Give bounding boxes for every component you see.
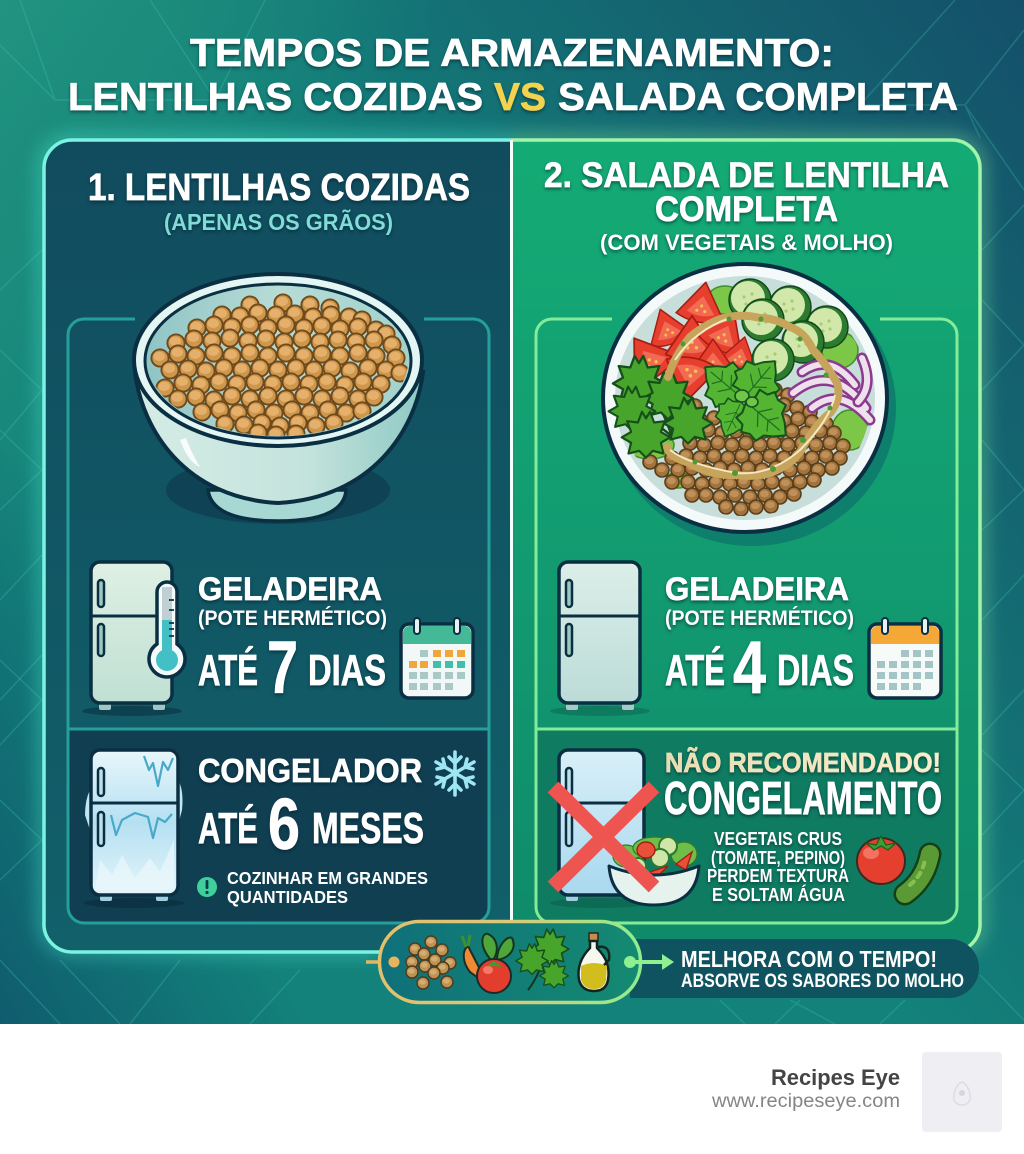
text: congelamento warning: NÃO RECOMENDADO!: [665, 747, 941, 778]
icon: snowflake: [436, 752, 474, 795]
ingredients capsule: [380, 922, 674, 1002]
cucumbers: [729, 279, 848, 381]
mint: [690, 346, 803, 455]
title: [68, 32, 958, 119]
text: congelamento warning: [664, 747, 942, 905]
lentils on plate: [643, 383, 850, 516]
title: TEMPOS DE ARMAZENAMENTO:: [190, 32, 834, 75]
label pill: ABSORVE OS SABORES DO MOLHO: [681, 971, 964, 992]
icon: frozen refrigerator: [84, 750, 184, 908]
storage frame: left: [67, 319, 490, 923]
text: geladeira 7 dias: DIAS: [308, 646, 386, 695]
parsley: [609, 356, 712, 458]
tomatoes: [612, 278, 765, 406]
text: congelamento warning: (TOMATE, PEPINO): [711, 848, 845, 868]
footer brand: [711, 1052, 1002, 1132]
logo placeholder: [922, 1052, 1002, 1132]
icon: olive oil: [578, 933, 609, 991]
heading: salada de lentilha completa: 2. SALADA DE LENTILHA: [544, 156, 949, 195]
text: congelamento warning: PERDEM TEXTURA: [707, 866, 849, 886]
connector left: [366, 960, 388, 964]
arrow: [624, 954, 674, 970]
text: congelador 6 meses: ATÉ: [198, 803, 258, 853]
icon: calendar teal: [401, 618, 473, 698]
icon: refrigerator: [550, 562, 650, 716]
lettuce: [626, 286, 868, 488]
red onions: [793, 358, 870, 420]
center divider: [510, 140, 513, 924]
footer brand: www.recipeseye.com: [711, 1091, 900, 1112]
salad bowl: [609, 837, 699, 905]
storage frame: right: [535, 319, 958, 923]
icon: salad plate: [603, 264, 896, 546]
text: congelador 6 meses: MESES: [312, 804, 424, 853]
icon: parsley: [516, 929, 569, 990]
text: congelador 6 meses: [198, 752, 424, 865]
heading: lentilhas cozidas: 1. LENTILHAS COZIDAS: [88, 167, 470, 209]
icon: thermometer: [149, 582, 185, 677]
panel: complete salad: [511, 140, 980, 952]
callout: batch cooking tip: QUANTIDADES: [227, 887, 348, 907]
heading: salada de lentilha completa: (COM VEGETAIS & MOLHO): [600, 230, 893, 255]
text: geladeira 4 dias: GELADEIRA: [665, 571, 849, 607]
footer brand: Recipes Eye: [771, 1065, 900, 1090]
title: VS: [494, 76, 546, 119]
text: congelamento warning: VEGETAIS CRUS: [714, 829, 842, 849]
title: LENTILHAS COZIDAS: [68, 76, 483, 119]
text: congelamento warning: E SOLTAM ÁGUA: [712, 884, 845, 905]
dressing drizzle: [667, 316, 838, 476]
heading: lentilhas cozidas: (APENAS OS GRÃOS): [164, 208, 393, 235]
text: geladeira 7 dias: [198, 571, 387, 709]
text: geladeira 7 dias: ATÉ: [198, 645, 258, 695]
callout: batch cooking tip: COZINHAR EM GRANDES: [227, 868, 428, 888]
text: geladeira 7 dias: 7: [267, 626, 298, 709]
icon: lentils: [406, 936, 456, 989]
label pill: [630, 939, 979, 998]
callout: batch cooking tip: [197, 868, 428, 907]
text: geladeira 4 dias: [665, 571, 854, 709]
heading: salada de lentilha completa: COMPLETA: [655, 190, 838, 229]
text: geladeira 7 dias: GELADEIRA: [198, 571, 382, 607]
icon: refrigerator with thermometer: [82, 562, 185, 716]
text: geladeira 7 dias: (POTE HERMÉTICO): [198, 607, 387, 630]
strip: improves with time: [366, 922, 979, 1002]
icon: crossed-out freezer with salad: [550, 750, 699, 908]
icon: tomato: [857, 836, 905, 884]
panel glow: [44, 140, 980, 950]
icon: vegetables: [462, 934, 514, 993]
icon: bowl of lentils: [134, 274, 423, 524]
text: congelador 6 meses: CONGELADOR: [198, 752, 422, 789]
text: geladeira 4 dias: 4: [733, 626, 766, 709]
panel: cooked lentils: [44, 140, 511, 952]
red cross: [553, 787, 654, 887]
title: SALADA COMPLETA: [558, 76, 958, 119]
text: geladeira 4 dias: ATÉ: [665, 645, 725, 695]
text: geladeira 4 dias: (POTE HERMÉTICO): [665, 607, 854, 630]
text: congelador 6 meses: 6: [268, 785, 300, 865]
heading: lentilhas cozidas: [88, 167, 470, 235]
heading: salada de lentilha completa: [544, 156, 949, 255]
text: geladeira 4 dias: DIAS: [777, 646, 854, 695]
icon: calendar orange: [869, 618, 941, 698]
icon: cucumber: [905, 854, 930, 894]
label pill: MELHORA COM O TEMPO!: [681, 946, 937, 972]
